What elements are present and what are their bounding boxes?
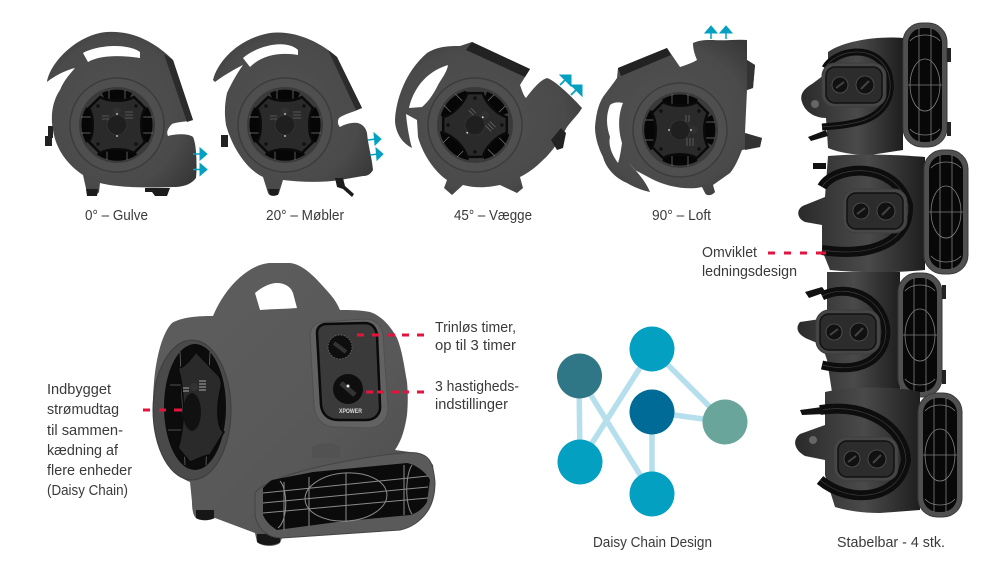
feet [196, 510, 280, 545]
side wheel with vents [153, 340, 231, 480]
fan at 90 degrees [595, 26, 762, 195]
label: power outlet: flere enheder [47, 463, 132, 479]
callout: speed settings [366, 390, 424, 394]
speed dial [333, 374, 363, 404]
label: power outlet: Indbygget [47, 382, 111, 398]
fan wheel [70, 78, 164, 172]
unit 2 [798, 150, 968, 274]
callout: timer [357, 334, 424, 336]
stacked fans [795, 23, 968, 517]
label: power outlet: til sammen- [47, 423, 123, 439]
label: speed settings: indstillinger [435, 397, 508, 413]
fan wheel [238, 78, 332, 172]
nodes [557, 326, 748, 516]
unit 4 [795, 388, 962, 517]
stand feet [335, 178, 354, 197]
daisy chain diagram [557, 326, 748, 516]
label: daisy chain: Daisy Chain Design [593, 535, 712, 551]
fan wheel [409, 59, 541, 191]
label: power outlet: (Daisy Chain) [47, 483, 128, 499]
label: cord wrap: ledningsdesign [702, 264, 797, 280]
fan body [395, 42, 582, 195]
label: timer: op til 3 timer [435, 338, 516, 354]
fan at 45 degrees [395, 42, 582, 195]
label: 20 degrees: 20° – Møbler [266, 208, 344, 224]
label: 90 degrees: 90° – Loft [652, 208, 711, 224]
label: power outlet: kædning af [47, 443, 119, 459]
airflow arrows [368, 133, 383, 160]
airflow arrows [193, 148, 207, 176]
main body [153, 263, 435, 546]
label: stackable: Stabelbar - 4 stk. [837, 535, 945, 551]
fan wheel [633, 83, 727, 177]
label: speed settings: 3 hastigheds- [435, 379, 519, 395]
stand clip [551, 128, 566, 150]
fan body [47, 32, 197, 195]
label: power outlet: strømudtag [47, 402, 119, 418]
knob boss above outlet [312, 443, 340, 458]
label: timer: Trinløs timer, [435, 320, 516, 336]
brand logo: XPOWER [339, 408, 362, 415]
front air outlet [255, 453, 435, 538]
main fan product [153, 263, 435, 546]
timer dial [328, 335, 352, 359]
callout: cord wrap [768, 252, 826, 254]
airflow arrows [560, 75, 582, 96]
fan body [213, 33, 373, 196]
airflow arrows [705, 26, 732, 39]
label: 45 degrees: 45° – Vægge [454, 208, 532, 224]
label: 0 degrees: 0° – Gulve [85, 208, 148, 224]
fan body [595, 40, 762, 195]
unit 1 [801, 23, 951, 155]
unit 3 [797, 272, 946, 397]
connecting lines [579, 349, 725, 494]
label: cord wrap: Omviklet [702, 245, 757, 261]
fan at 20 degrees [213, 33, 383, 197]
control panel [310, 319, 388, 428]
stand feet [86, 188, 170, 196]
callout: power outlet [143, 408, 182, 412]
fan at 0 degrees [45, 32, 207, 196]
